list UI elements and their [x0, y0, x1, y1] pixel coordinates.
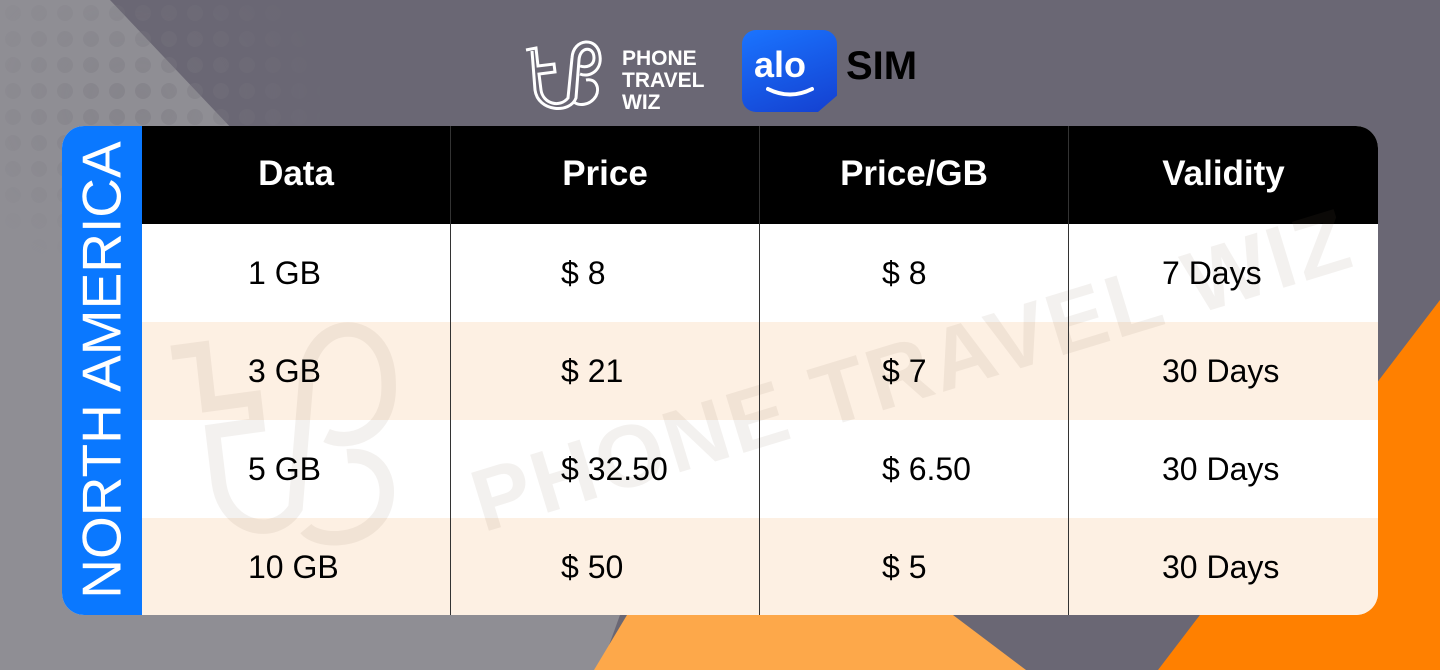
validity column: [1162, 255, 1279, 585]
text: brand name: PHONE: [622, 47, 697, 70]
logo: phone travel wiz: [526, 40, 704, 114]
validity column: 30 Days: [1162, 353, 1279, 389]
price column: $ 32.50: [561, 451, 668, 487]
price per GB column: [882, 255, 971, 585]
text: brand name: [622, 47, 704, 114]
table panel: [62, 126, 1378, 615]
watermark logo: [170, 322, 396, 546]
text: brand name: TRAVEL: [622, 69, 704, 92]
data column: 1 GB: [248, 255, 321, 291]
watermark: PHONE TRAVEL WIZ: [460, 188, 1364, 551]
data column: 3 GB: [248, 353, 321, 389]
data column: 5 GB: [248, 451, 321, 487]
icon: alo: [742, 30, 837, 112]
header: Data: Data: [258, 154, 334, 193]
price column: [561, 255, 668, 585]
text: SIM: SIM: [846, 44, 917, 88]
region label: NORTH AMERICA: [70, 141, 132, 599]
validity column: 7 Days: [1162, 255, 1262, 291]
logo: alo sim: [742, 30, 917, 112]
header: Price: Price: [562, 154, 648, 193]
text: brand name: WIZ: [622, 91, 660, 114]
price per GB column: $ 5: [882, 549, 926, 585]
icon: alo: alo: [754, 44, 806, 85]
price column: $ 8: [561, 255, 605, 291]
data column: [248, 255, 339, 585]
icon: tp logo: [526, 40, 602, 110]
price column: $ 50: [561, 549, 623, 585]
data column: 10 GB: [248, 549, 339, 585]
column dividers: [450, 126, 451, 615]
validity column: 30 Days: [1162, 451, 1279, 487]
header: Price/GB: Price/GB: [840, 154, 988, 193]
price per GB column: $ 7: [882, 353, 926, 389]
price per GB column: $ 6.50: [882, 451, 971, 487]
price column: $ 21: [561, 353, 623, 389]
header: Validity: Validity: [1162, 154, 1285, 193]
price per GB column: $ 8: [882, 255, 926, 291]
validity column: 30 Days: [1162, 549, 1279, 585]
